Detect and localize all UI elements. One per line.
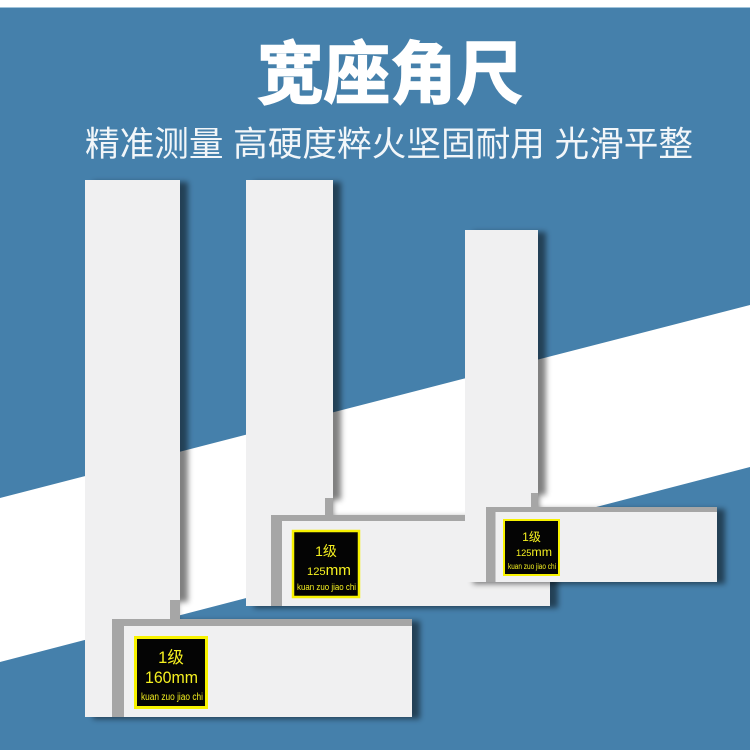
subtitle: 精准测量 高硬度粹火坚固耐用 光滑平整 [85, 126, 693, 164]
label: large 160mm [136, 638, 206, 708]
ruler: large 160mm [85, 180, 412, 717]
label: large 160mm: 160mm [145, 669, 198, 687]
white diagonal band [0, 305, 750, 662]
ruler: right 125mm [465, 230, 717, 582]
ruler: middle 125mm [246, 180, 550, 606]
title: 宽座角尺 [257, 37, 523, 113]
label: right 125mm [504, 520, 559, 575]
label: right 125mm: 1级 [522, 530, 541, 544]
label: middle 125mm [293, 531, 359, 597]
label: middle 125mm: kuan zuo jiao chi [297, 582, 356, 593]
label: middle 125mm: 1级 [315, 543, 337, 559]
label: middle 125mm: 125mm [307, 562, 351, 579]
label: large 160mm: kuan zuo jiao chi [141, 692, 203, 703]
label: large 160mm: 1级 [158, 648, 184, 667]
label: right 125mm: 125mm [516, 545, 552, 559]
label: right 125mm: kuan zuo jiao chi [508, 562, 556, 571]
